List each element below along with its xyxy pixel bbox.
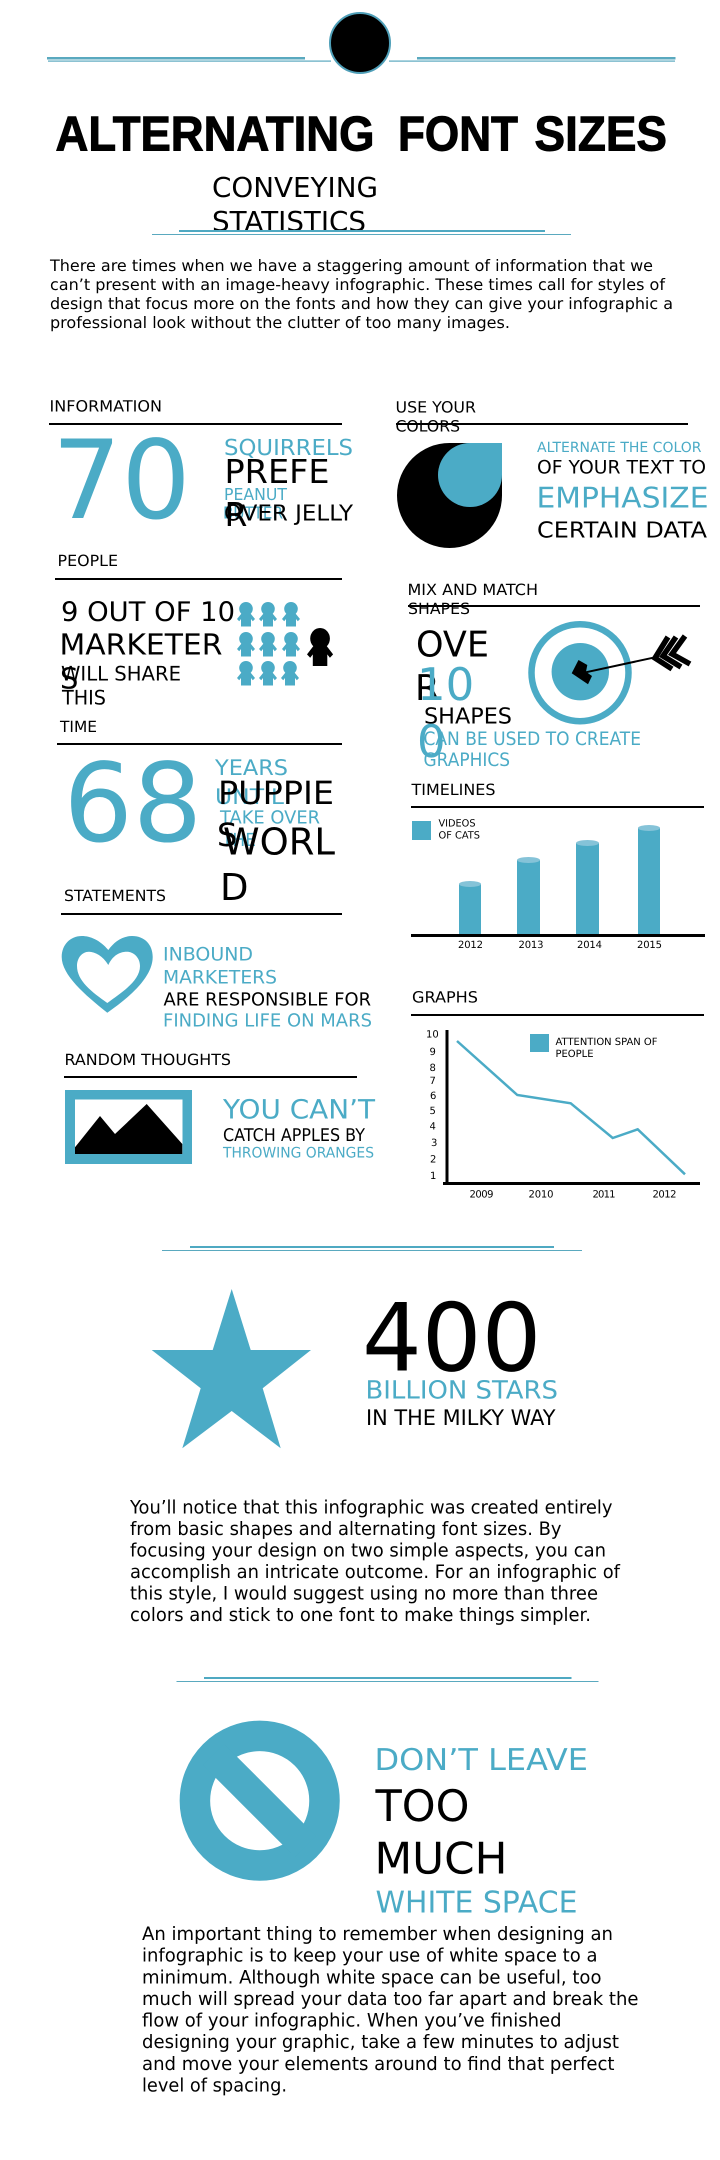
title: FONT	[398, 108, 518, 162]
shapes statement: CAN BE USED TO CREATE	[424, 729, 641, 750]
inbound marketers statement	[163, 944, 372, 1032]
statement: 9 out of 10: THIS	[61, 686, 106, 710]
legend: videos of cats: VIDEOS	[438, 818, 476, 830]
paragraph: created from basic shapes: focusing your design on two simple aspects, you can	[130, 1540, 606, 1562]
paragraph: white space	[142, 1924, 638, 2096]
icon: heart	[62, 936, 153, 1013]
subtitle: conveying statistics: STATISTICS	[212, 206, 366, 238]
intro paragraph: There are times when we have a staggering amount of information that we	[49, 256, 653, 275]
panel: mix and match shapes	[408, 581, 700, 771]
shapes statement: GRAPHICS	[424, 750, 510, 771]
squirrels statement: R	[224, 495, 247, 534]
paragraph: created from basic shapes: from basic shapes and alternating font sizes. By	[130, 1519, 562, 1540]
heading: graphs: GRAPHS	[412, 988, 478, 1006]
title: ALTERNATING	[56, 108, 374, 162]
shapes statement: 0	[417, 715, 446, 768]
stat: 400 billion stars	[362, 1284, 558, 1431]
big number 68: 68	[64, 740, 202, 867]
paragraph: created from basic shapes: this style, I would suggest using no more than three	[130, 1584, 598, 1604]
squirrels statement	[223, 436, 354, 534]
paragraph: white space: flow of your infographic. When you’ve finished	[142, 2010, 562, 2032]
line chart: 2010	[528, 1190, 554, 1200]
heading: use your colors: USE YOUR	[396, 398, 476, 416]
line chart: 4	[430, 1122, 436, 1132]
statement: don't leave too much white space: WHITE SPACE	[376, 1886, 578, 1920]
heading: timelines: TIMELINES	[410, 781, 496, 799]
statement: 9 out of 10: 9 OUT OF 10	[61, 597, 235, 628]
panel: statements	[61, 887, 372, 1032]
line chart: 3	[431, 1138, 437, 1149]
line chart: 7	[430, 1076, 436, 1087]
paragraph: white space: An important thing to remember when designing an	[142, 1924, 613, 1945]
statement: don't leave too much white space	[374, 1743, 588, 1920]
puppies statement	[214, 756, 335, 909]
heading: statements: STATEMENTS	[64, 887, 166, 905]
puppies statement: YEARS	[214, 756, 288, 781]
puppies statement: WORL	[223, 820, 335, 864]
squirrels statement: PEANUT	[224, 485, 288, 504]
paragraph: white space: much will spread your data too far apart and break the	[142, 1989, 638, 2010]
heading: random thoughts: RANDOM THOUGHTS	[64, 1051, 231, 1069]
apples statement: CATCH APPLES BY	[223, 1126, 365, 1146]
icon: prohibition sign	[195, 1736, 324, 1865]
puppies statement: S	[217, 816, 237, 854]
statement: don't leave too much white space: DON’T LEAVE	[374, 1743, 588, 1778]
line chart: 6	[430, 1091, 436, 1102]
inbound marketers statement: ARE RESPONSIBLE FOR	[164, 990, 371, 1010]
intro paragraph	[49, 256, 673, 332]
paragraph: created from basic shapes: You’ll notice that this infographic was created entirely	[129, 1498, 613, 1518]
icon: picture frame with mountains	[65, 1090, 192, 1164]
heading: use your colors	[396, 398, 688, 436]
line chart: 2012	[652, 1190, 676, 1200]
panel: people	[55, 552, 342, 710]
legend: videos of cats	[412, 818, 480, 842]
intro paragraph: design that focus more on the fonts and how they can give your infographic a	[50, 294, 673, 313]
paragraph: created from basic shapes: accomplish an intricate outcome. For an infographic of	[130, 1562, 620, 1583]
heading: mix and match shapes: SHAPES	[408, 600, 470, 618]
squirrels statement: PREFE	[224, 452, 330, 491]
heading: mix and match shapes: MIX AND MATCH	[408, 581, 538, 599]
puppies statement: TAKE OVER	[219, 808, 320, 828]
subtitle: conveying statistics: CONVEYING	[212, 172, 378, 204]
statement: don't leave too much white space: TOO	[375, 1782, 470, 1832]
line chart: 5	[430, 1106, 436, 1117]
shapes statement: R	[415, 668, 440, 709]
paragraph: created from basic shapes: colors and stick to one font to make things simpler.	[130, 1605, 591, 1626]
apples statement: THROWING ORANGES	[222, 1146, 374, 1162]
intro paragraph: can’t present with an image-heavy infographic. These times call for styles of	[50, 275, 665, 294]
subtitle: conveying statistics	[152, 176, 571, 235]
paragraph: white space: and move your elements around to find that perfect	[142, 2054, 614, 2075]
stat: 400 billion stars: 400	[362, 1284, 541, 1394]
colour statement: CERTAIN DATA	[537, 518, 707, 544]
line chart: 2009	[470, 1190, 494, 1200]
intro paragraph: professional look without the clutter of too many images.	[50, 313, 510, 332]
statement: 9 out of 10: MARKETER	[60, 628, 222, 662]
squirrels statement: BUTTER	[223, 504, 283, 522]
line chart: 10	[426, 1030, 439, 1040]
line chart	[426, 1030, 700, 1200]
heading: information: INFORMATION	[50, 398, 162, 416]
heading: time: TIME	[59, 718, 97, 736]
line chart: 2011	[592, 1190, 616, 1200]
colour statement: ALTERNATE THE COLOR	[537, 440, 702, 456]
legend: attention span	[530, 1034, 658, 1060]
title	[56, 108, 667, 162]
stat: 400 billion stars: BILLION STARS	[366, 1376, 558, 1404]
icon: target	[532, 624, 628, 721]
legend: attention span: ATTENTION SPAN OF	[556, 1037, 658, 1048]
bar chart: cylinders: 2013	[518, 940, 544, 951]
panel: time	[57, 718, 342, 909]
apples statement	[222, 1094, 376, 1162]
big number 70: 70	[52, 417, 191, 544]
shapes statement: SHAPES	[424, 704, 512, 730]
puppies statement: PUPPIE	[218, 774, 334, 812]
statement: 9 out of 10: WILL SHARE	[61, 662, 181, 686]
line chart: 8	[430, 1063, 436, 1074]
paragraph: created from basic shapes	[129, 1498, 620, 1626]
paragraph: white space: level of spacing.	[142, 2076, 287, 2096]
puppies statement: UNTIL	[215, 785, 284, 810]
shapes statement	[415, 624, 641, 771]
puppies statement: D	[220, 866, 248, 909]
legend: attention span: PEOPLE	[556, 1049, 594, 1060]
colour statement: EMPHASIZE	[536, 482, 708, 514]
squirrels statement: OVER JELLY	[224, 502, 354, 526]
line chart: 1	[430, 1171, 436, 1182]
heading: mix and match shapes	[408, 581, 700, 618]
panel: use your colors	[396, 398, 708, 548]
divider above star section	[162, 1246, 582, 1251]
statement: don't leave too much white space: MUCH	[374, 1834, 508, 1884]
statement: 9 out of 10	[60, 597, 235, 710]
icon: star	[152, 1289, 311, 1448]
panel: information	[49, 398, 354, 544]
shapes statement: 10	[417, 658, 474, 711]
bar chart: cylinders: 2014	[577, 940, 602, 951]
colour statement	[536, 440, 708, 544]
inbound marketers statement: INBOUND	[163, 944, 253, 966]
line chart: 2	[430, 1154, 436, 1166]
bar chart: cylinders: 2012	[458, 940, 483, 951]
icon: nine teal people	[237, 602, 300, 686]
paragraph: white space: infographic is to keep your use of white space to a	[142, 1946, 598, 1966]
icon: black person	[307, 628, 333, 666]
colour statement: OF YOUR TEXT TO	[537, 458, 706, 478]
squirrels statement: SQUIRRELS	[224, 436, 353, 461]
puppies statement: THE	[221, 830, 256, 851]
legend: videos of cats: OF CATS	[438, 830, 480, 842]
bar chart: cylinders: 2015	[637, 940, 662, 951]
divider above white space section	[176, 1677, 598, 1682]
icon: arrow	[572, 636, 690, 684]
inbound marketers statement: MARKETERS	[163, 968, 277, 988]
bar chart: cylinders	[411, 825, 705, 951]
statement: 9 out of 10: S	[60, 662, 78, 696]
paragraph: white space: designing your graphic, take a few minutes to adjust	[142, 2032, 619, 2053]
panel: timelines	[410, 781, 705, 951]
shapes statement: OVE	[416, 624, 489, 666]
title: SIZES	[534, 108, 667, 162]
panel: graphs	[411, 988, 704, 1200]
heading: people: PEOPLE	[58, 552, 118, 570]
apples statement: YOU CAN’T	[222, 1094, 376, 1126]
panel: random thoughts	[64, 1051, 376, 1164]
line chart: 9	[430, 1047, 436, 1058]
icon: nested drops	[397, 443, 502, 548]
stat: 400 billion stars: IN THE MILKY WAY	[366, 1406, 556, 1431]
paragraph: white space: minimum. Although white space can be useful, too	[142, 1968, 602, 1988]
header ornament: circle with rules	[47, 13, 676, 73]
inbound marketers statement: FINDING LIFE ON MARS	[163, 1010, 372, 1032]
heading: use your colors: COLORS	[396, 418, 460, 436]
